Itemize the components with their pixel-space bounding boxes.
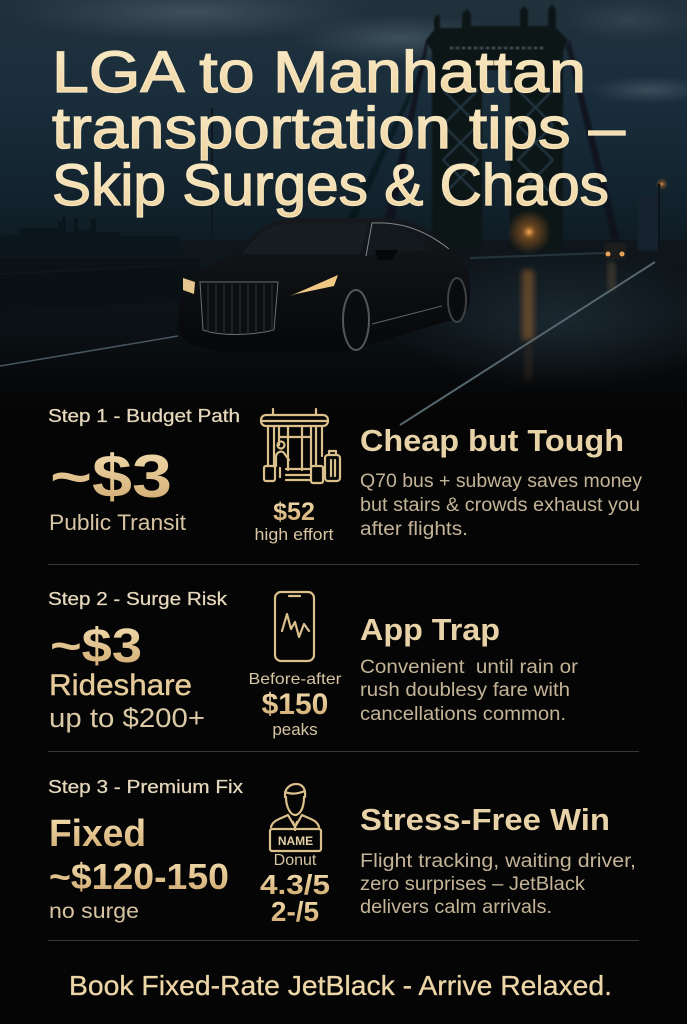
step 2 label: Step 2 - Surge Risk: [48, 589, 228, 609]
step 2 stat: Before-after: [248, 671, 342, 688]
step 1 price: ~$3: [50, 443, 172, 510]
step 2 upper fare: up to $200+: [49, 703, 205, 733]
grille: [200, 282, 278, 334]
orange bridge light: [507, 210, 551, 254]
step 2 description: Convenient until rain or: [360, 657, 579, 678]
step 1 heading: Cheap but Tough: [360, 423, 624, 458]
step 2 description: rush doublesy fare with: [360, 680, 570, 701]
step 3 note: no surge: [49, 900, 139, 923]
bridge tower: [330, 4, 660, 255]
panel: step 3 premium fix: [48, 777, 636, 927]
step 2 description: cancellations common.: [360, 704, 566, 725]
reflection: [522, 270, 534, 340]
title: Skip Surges & Chaos: [52, 153, 609, 218]
step 3 stat: [260, 852, 330, 927]
step 2 option name: Rideshare: [49, 669, 192, 702]
street lamp: [211, 108, 213, 243]
title: LGA to Manhattan: [52, 40, 586, 105]
step 2 description: [360, 657, 579, 725]
distant car: [604, 243, 626, 259]
road rail: [0, 253, 604, 274]
step 1 label: Step 1 - Budget Path: [48, 406, 240, 426]
title: [52, 40, 626, 218]
step 1 stat: high effort: [254, 525, 334, 544]
step 3 price: ~$120-150: [49, 856, 229, 897]
step 1 description: Q70 bus + subway saves money: [360, 471, 643, 492]
step 1 description: [360, 471, 643, 540]
step 2 heading: App Trap: [360, 612, 500, 647]
call to action: Book Fixed-Rate JetBlack - Arrive Relaxed.: [69, 970, 612, 1001]
step 3 description: [360, 851, 636, 918]
step 2 stat: peaks: [272, 720, 318, 739]
title: transportation tips –: [52, 96, 626, 161]
skyline: [0, 217, 180, 252]
panel: step 2 surge risk: [48, 589, 579, 739]
step 3 heading: Stress-Free Win: [360, 802, 610, 837]
step 1 stat: [254, 498, 334, 544]
step 3 stat: 2-/5: [271, 896, 319, 927]
step 3 stat: 4.3/5: [260, 869, 330, 900]
step 1 description: after flights.: [360, 519, 468, 540]
wheels: [343, 290, 369, 350]
icon: chauffeur holding name sign: [270, 784, 321, 851]
limousine: [178, 218, 470, 352]
icon: transit turnstile with luggage: [261, 409, 340, 483]
tower lattice: [443, 48, 553, 195]
step 1 option name: Public Transit: [49, 510, 186, 535]
step 2 stat: $150: [262, 688, 328, 721]
headlights: [290, 275, 338, 296]
road markings: [0, 336, 178, 366]
panel: step 1 budget path: [48, 406, 643, 544]
step 3 description: delivers calm arrivals.: [360, 897, 552, 918]
step 3 label: Step 3 - Premium Fix: [48, 777, 243, 797]
icon: chauffeur holding name sign: NAME: [278, 834, 313, 848]
step 3 stat: Donut: [274, 852, 317, 869]
icon: phone with surge line: [275, 592, 314, 661]
step 3 fixed label: Fixed: [49, 813, 146, 855]
step 2 price: ~$3: [50, 620, 142, 673]
step 1 description: but stairs & crowds exhaust you: [360, 495, 640, 516]
step 3 description: Flight tracking, waiting driver,: [360, 851, 636, 872]
step 2 stat: [248, 671, 342, 739]
hero photo: bridge, limousine and wet road: [0, 0, 687, 425]
step 1 stat: $52: [273, 498, 315, 526]
step 3 description: zero surprises – JetBlack: [360, 874, 586, 895]
mirror: [375, 250, 398, 260]
